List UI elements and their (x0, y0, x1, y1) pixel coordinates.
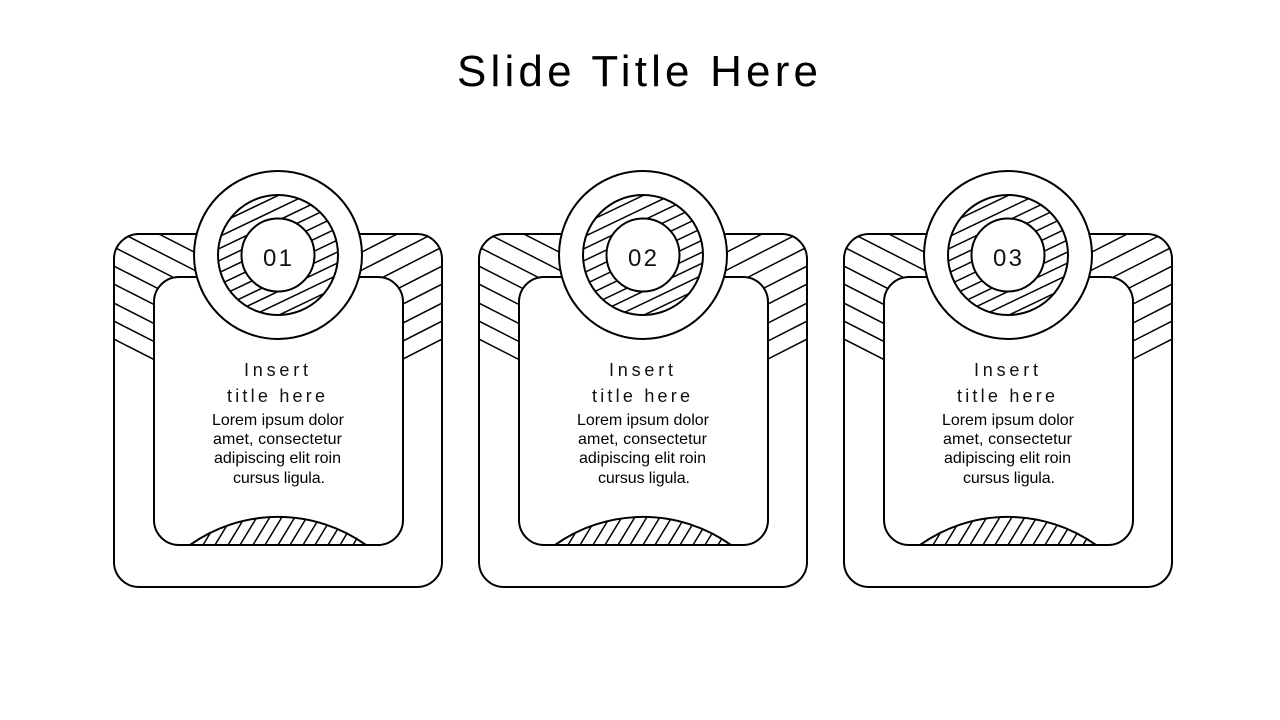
card 01 body text: cursus ligula. (233, 470, 325, 487)
number 01: 01 (263, 245, 292, 272)
card 02 heading: Insert (609, 360, 673, 380)
icon: card 02 frame with hatched bands and medallion (465, 162, 821, 587)
card 03 body text: cursus ligula. (963, 470, 1055, 487)
number 02: 02 (628, 245, 657, 272)
card 01 heading: Insert (244, 360, 308, 380)
card 01 heading: title here (227, 386, 325, 406)
card 03 heading: title here (957, 386, 1055, 406)
card 03 body text: amet, consectetur (943, 431, 1073, 448)
card 01 body text: adipiscing elit roin (214, 450, 341, 467)
card 02 body text: Lorem ipsum dolor (577, 412, 710, 429)
card 02 body text: cursus ligula. (598, 470, 690, 487)
number 03: 03 (993, 245, 1022, 272)
card 02 body text: adipiscing elit roin (579, 450, 706, 467)
icon: card 03 frame with hatched bands and medallion (830, 162, 1186, 587)
card 01 body text: Lorem ipsum dolor (212, 412, 345, 429)
card 03 body text: adipiscing elit roin (944, 450, 1071, 467)
card 02 heading: title here (592, 386, 690, 406)
card 02 body text: amet, consectetur (578, 431, 708, 448)
icon: card 01 frame with hatched bands and medallion (100, 162, 456, 587)
panel: card 02 (465, 162, 821, 587)
panel: card 01 (100, 162, 456, 587)
panel: card 03 (830, 162, 1186, 587)
card 03 heading: Insert (974, 360, 1038, 380)
card 01 body text: amet, consectetur (213, 431, 343, 448)
title: Slide Title Here (457, 47, 818, 96)
card 03 body text: Lorem ipsum dolor (942, 412, 1075, 429)
